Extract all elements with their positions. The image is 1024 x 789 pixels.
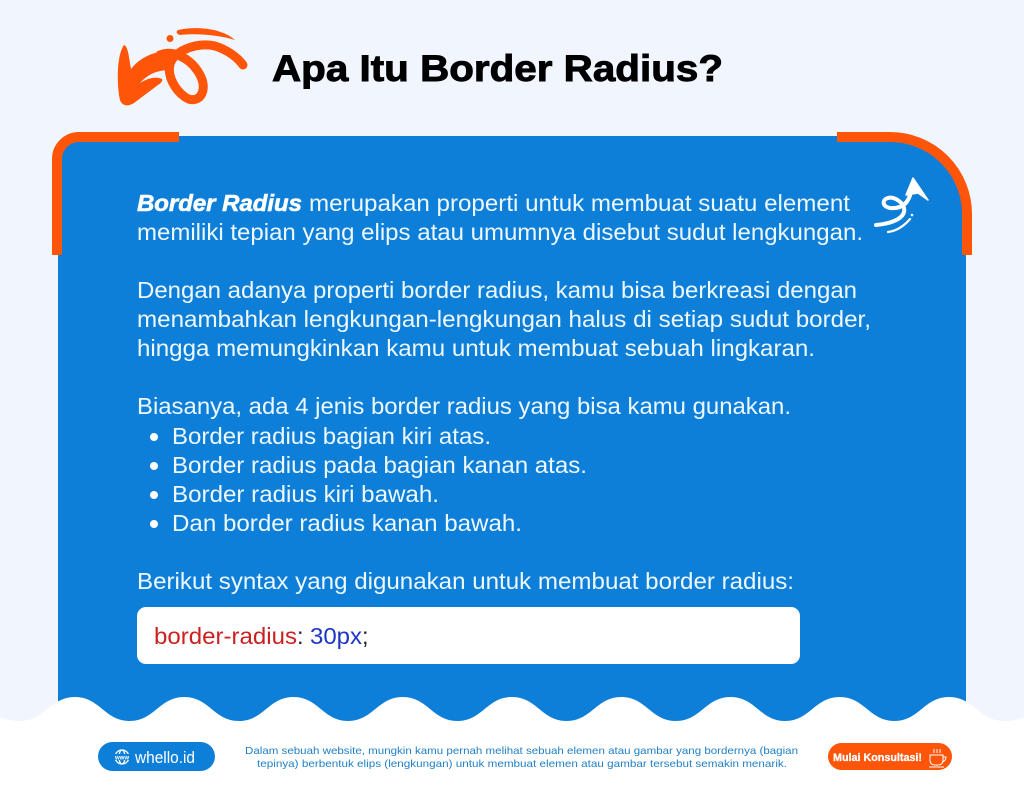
footer description: Dalam sebuah website, mungkin kamu pernah melihat sebuah elemen atau gambar yang bordernya (bagian	[245, 745, 798, 757]
badge: whello.id: www	[114, 756, 129, 762]
icon: orange swirl arrow	[118, 28, 243, 105]
text block: second paragraph	[137, 277, 871, 361]
code box: :	[297, 623, 304, 649]
text block: intro paragraph: memiliki tepian yang elips atau umumnya disebut sudut lengkungan.	[137, 219, 863, 245]
text block: intro paragraph	[137, 190, 863, 245]
orange corner accent: top left	[57, 137, 179, 255]
text block: list of border radius types: Border radius pada bagian kanan atas.	[172, 452, 587, 478]
text block: list of border radius types: Border radius bagian kiri atas.	[172, 423, 491, 449]
button: Mulai Konsultasi	[828, 743, 952, 770]
code box: 30px	[310, 623, 362, 649]
text block: list of border radius types: Dan border radius kanan bawah.	[172, 510, 522, 536]
panel: blue content card	[58, 136, 966, 724]
text block: list of border radius types: Border radius kiri bawah.	[172, 481, 439, 507]
text block: intro paragraph: merupakan properti untuk membuat suatu element	[309, 190, 850, 216]
text block: intro paragraph: Border Radius	[137, 190, 302, 216]
icon: white swirl arrow	[876, 178, 928, 232]
text block: list of border radius types	[137, 393, 791, 536]
text block: syntax intro: Berikut syntax yang digunakan untuk membuat border radius:	[137, 568, 794, 594]
text block: list of border radius types: Biasanya, ada 4 jenis border radius yang bisa kamu gunakan.	[137, 393, 791, 419]
orange corner accent: top right	[837, 137, 967, 255]
text block: second paragraph: menambahkan lengkungan-lengkungan halus di setiap sudut border,	[137, 306, 871, 332]
white wave footer background	[0, 697, 1024, 789]
text block: second paragraph: hingga memungkinkan kamu untuk membuat sebuah lingkaran.	[137, 335, 815, 361]
footer description	[245, 745, 798, 770]
badge: whello.id	[98, 742, 215, 771]
code box: border-radius	[154, 623, 297, 649]
button: Mulai Konsultasi: Mulai Konsultasi!	[833, 752, 922, 764]
title: Apa Itu Border Radius?	[272, 48, 723, 89]
code box: ;	[362, 623, 369, 649]
code box	[137, 607, 800, 664]
badge: whello.id: whello.id	[134, 748, 195, 767]
footer description: tepinya) berbentuk elips (lengkungan) untuk membuat elemen atau gambar tersebut semakin menarik.	[257, 758, 787, 770]
text block: second paragraph: Dengan adanya properti border radius, kamu bisa berkreasi dengan	[137, 277, 857, 303]
